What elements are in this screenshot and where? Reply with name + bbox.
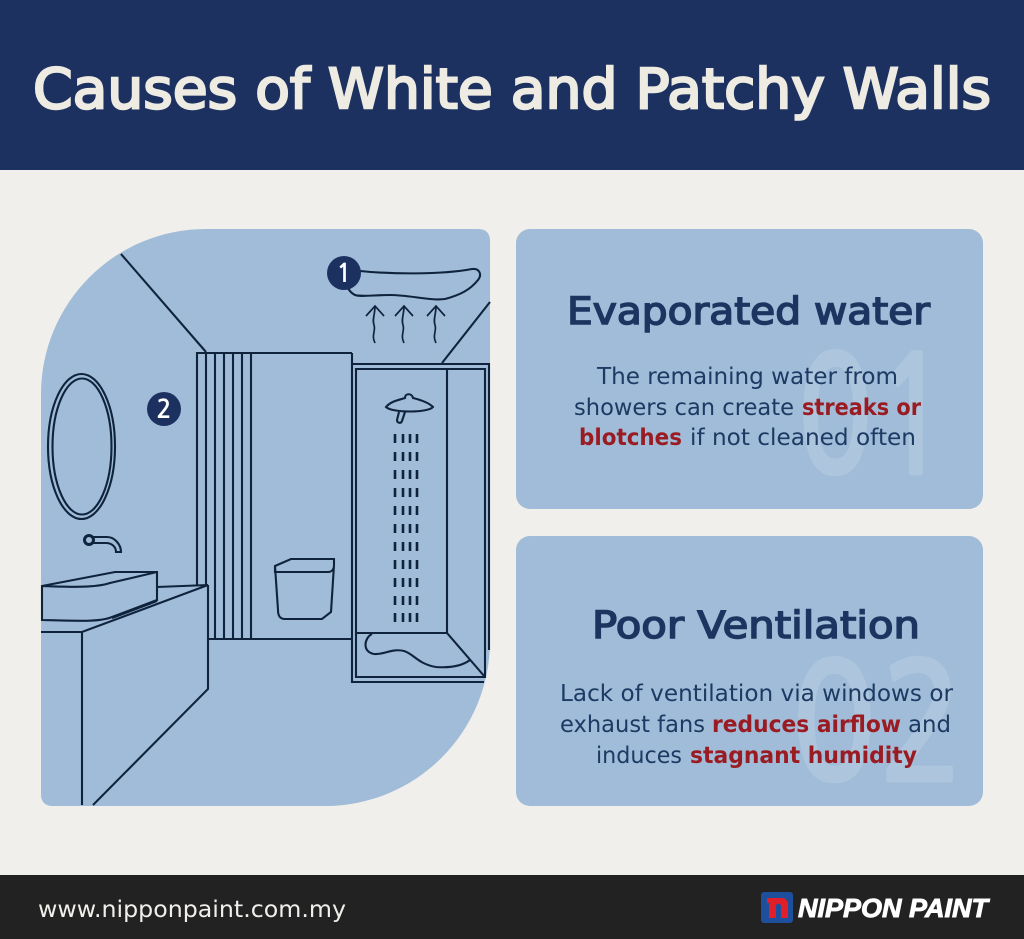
- description: Lack of ventilation via windows or: [560, 679, 953, 707]
- panel: bathroom illustration: [41, 229, 490, 806]
- watermark number 02: 02: [790, 643, 966, 807]
- title: Causes of White and Patchy Walls: [33, 57, 991, 121]
- description: exhaust fans: [560, 710, 705, 738]
- website url: www.nipponpaint.com.my: [38, 897, 346, 923]
- description: blotches: [579, 423, 682, 451]
- description: streaks or: [802, 393, 921, 421]
- logo: Nippon Paint: NIPPON PAINT: [798, 893, 990, 923]
- footer bar: [0, 875, 1024, 939]
- icon: faucet: [84, 536, 121, 552]
- description: The remaining water from: [596, 362, 898, 390]
- description: reduces airflow: [712, 710, 901, 738]
- heading: Evaporated water: [567, 290, 931, 333]
- description: showers can create: [574, 393, 794, 421]
- description: [560, 679, 953, 769]
- steam cloud: [348, 269, 480, 299]
- description: stagnant humidity: [690, 741, 917, 769]
- description: induces: [596, 741, 682, 769]
- water drops: [395, 434, 417, 622]
- panel: evaporated water: [516, 229, 983, 509]
- vanity counter and sink: [41, 572, 208, 805]
- marker 2: 2: [156, 397, 172, 422]
- header banner: [0, 0, 1024, 170]
- icon: toilet: [275, 559, 334, 619]
- description: if not cleaned often: [690, 423, 916, 451]
- watermark number 01: 01: [796, 336, 952, 500]
- icon: shower head: [386, 394, 433, 423]
- shower curtain: [197, 353, 352, 639]
- icon: mirror: [48, 374, 115, 519]
- description: and: [908, 710, 951, 738]
- marker 1: 1: [336, 261, 352, 286]
- marker 2: [147, 392, 181, 426]
- marker 1: [327, 256, 361, 290]
- description: [574, 362, 921, 451]
- panel: poor ventilation: [516, 536, 983, 807]
- shower cabin: [352, 353, 489, 682]
- wall and ceiling lines: [121, 254, 490, 363]
- steam arrows: [366, 306, 445, 343]
- heading: Poor Ventilation: [592, 604, 920, 647]
